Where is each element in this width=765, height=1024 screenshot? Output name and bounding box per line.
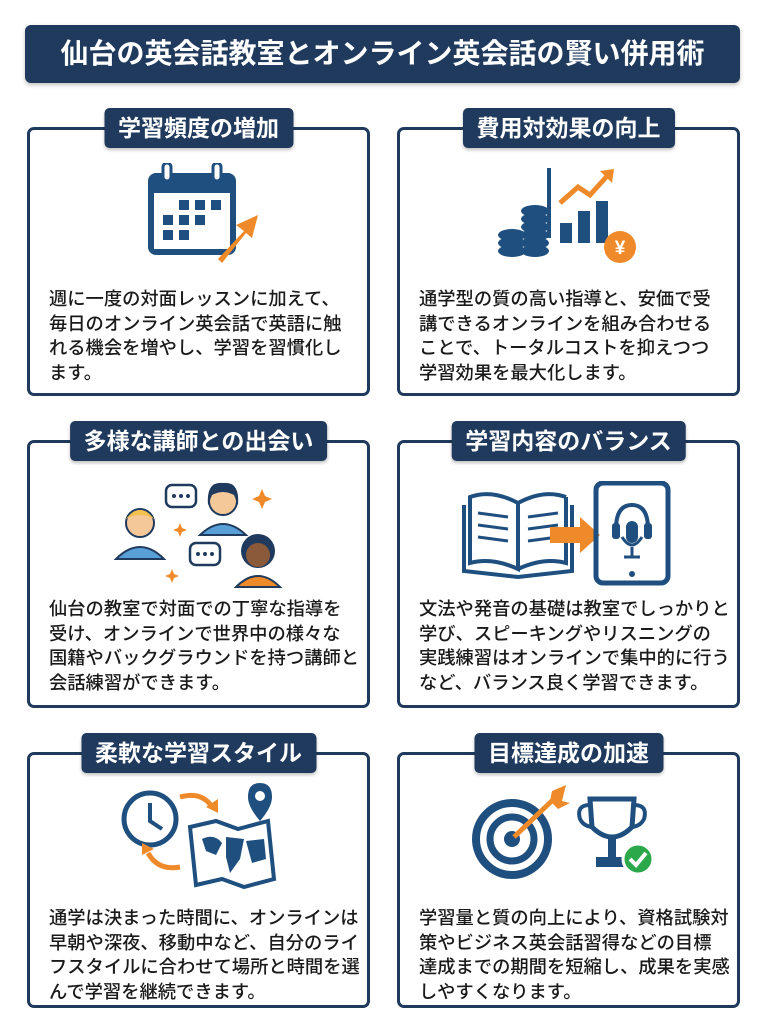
title xyxy=(25,25,740,83)
heading: 目標達成の加速 xyxy=(488,740,649,766)
title: 仙台の英会話教室とオンライン英会話の賢い併用術 xyxy=(60,38,704,69)
heading: 柔軟な学習スタイル xyxy=(95,740,302,766)
text: れる機会を増やし、学習を習慣化し xyxy=(49,337,342,358)
text: 学習量と質の向上により、資格試験対 xyxy=(419,907,729,928)
heading xyxy=(462,108,674,148)
text: 国籍やバックグラウンドを持つ講師と xyxy=(49,647,359,668)
panel: 学習頻度の増加 xyxy=(27,127,370,396)
icon: clock and map xyxy=(122,783,276,889)
text xyxy=(419,598,730,692)
text xyxy=(49,907,360,1002)
heading xyxy=(104,108,293,148)
text: など、バランス良く学習できます。 xyxy=(419,672,708,692)
text xyxy=(49,288,342,382)
icon: diverse teachers xyxy=(114,482,282,588)
text: 通学型の質の高い指導と、安価で受 xyxy=(419,288,711,309)
heading: 多様な講師との出会い xyxy=(84,428,313,454)
text: 受け、オンラインで世界中の様々な xyxy=(49,622,341,644)
text: 会話練習ができます。 xyxy=(49,672,230,692)
text: 達成までの期間を短縮し、成果を実感 xyxy=(419,956,730,977)
heading: 学習内容のバランス xyxy=(465,428,672,454)
text: しやすくなります。 xyxy=(419,980,582,1002)
heading xyxy=(70,421,327,461)
icon: coins and chart xyxy=(498,168,636,263)
text xyxy=(419,288,711,382)
icon: book to tablet xyxy=(462,481,670,586)
heading xyxy=(81,733,316,773)
text: 文法や発音の基礎は教室でしっかりと xyxy=(419,598,730,619)
text: ことで、トータルコストを抑えつつ xyxy=(419,337,709,358)
text: んで学習を継続できます。 xyxy=(49,980,266,1002)
text: 毎日のオンライン英会話で英語に触 xyxy=(49,312,342,334)
icon: coins and chart: ¥ xyxy=(615,238,626,259)
text: 仙台の教室で対面での丁寧な指導を xyxy=(49,598,342,619)
text: 早朝や深夜、移動中など、自分のライ xyxy=(49,932,359,952)
text xyxy=(419,907,730,1002)
text: 策やビジネス英会話習得などの目標 xyxy=(419,932,712,952)
text: 学習効果を最大化します。 xyxy=(419,362,637,382)
text: 週に一度の対面レッスンに加えて、 xyxy=(49,288,340,309)
text xyxy=(49,598,359,692)
text: 実践練習はオンラインで集中的に行う xyxy=(419,647,730,668)
text: ます。 xyxy=(49,362,102,382)
panel: 柔軟な学習スタイル xyxy=(27,752,370,1008)
panel: 目標達成の加速 xyxy=(397,752,740,1008)
icon: target and trophy xyxy=(472,785,652,879)
heading xyxy=(451,421,686,461)
text: 通学は決まった時間に、オンラインは xyxy=(49,907,359,928)
heading: 学習頻度の増加 xyxy=(118,115,279,141)
heading xyxy=(474,733,663,773)
panel: 学習内容のバランス xyxy=(397,440,740,708)
heading: 費用対効果の向上 xyxy=(476,115,660,141)
panel: 費用対効果の向上 xyxy=(397,127,740,396)
text: フスタイルに合わせて場所と時間を選 xyxy=(49,956,360,977)
panel: 多様な講師との出会い xyxy=(27,440,370,708)
text: 学び、スピーキングやリスニングの xyxy=(419,622,711,644)
icon: calendar with arrow xyxy=(148,163,258,263)
text: 講できるオンラインを組み合わせる xyxy=(419,312,711,334)
